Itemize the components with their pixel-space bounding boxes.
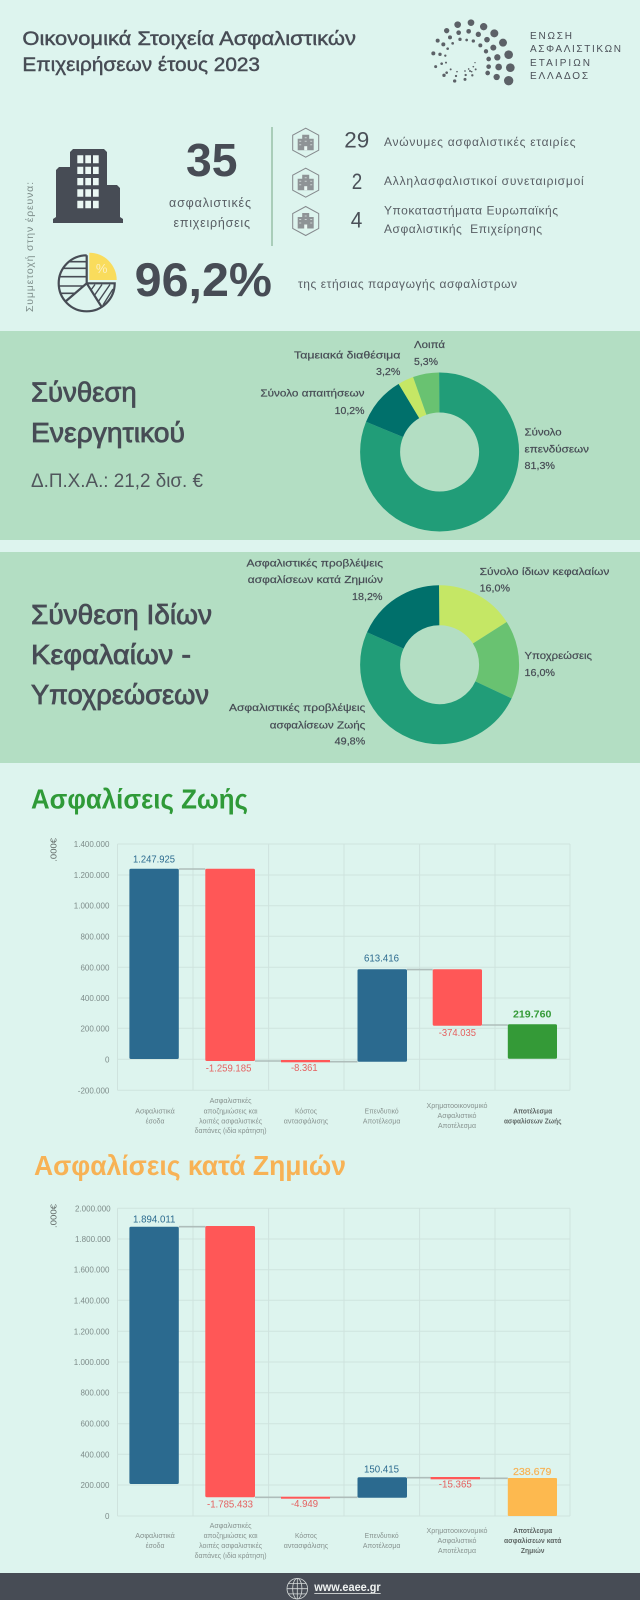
row: mutual cooperatives: 2 — [352, 169, 362, 194]
row: societes anonymes — [293, 128, 576, 157]
donut labels: equity and liabilities: Υποχρεώσεις — [524, 650, 592, 662]
row: societes anonymes: 29 — [344, 128, 369, 152]
heading: assets composition: Ενεργητικού — [31, 417, 185, 448]
donut labels: equity and liabilities: 49,8% — [335, 736, 365, 747]
donut labels: assets: Σύνολο — [524, 427, 562, 439]
y axis labels: 200.000 — [80, 1024, 110, 1033]
donut labels: equity and liabilities: ασφαλίσεων Ζωής — [270, 719, 366, 731]
heading: assets composition — [31, 377, 185, 448]
category labels: Ζημιών — [521, 1546, 545, 1555]
value labels: -1.785.433 — [207, 1499, 253, 1511]
value labels: -4.949 — [291, 1498, 318, 1510]
category labels: δαπάνες (ιδία κράτηση) — [195, 1551, 267, 1560]
logo wordmark: ΕΛΛΑΔΟΣ — [530, 71, 588, 82]
donut labels: equity and liabilities: Ασφαλιστικές προβλέψεις — [229, 702, 366, 714]
icon: logo dot swirl — [431, 19, 515, 85]
stat: 35 insurance companies: επιχειρήσεις — [174, 216, 250, 230]
connectors — [179, 869, 508, 1062]
stat: 35 insurance companies: 35 — [186, 134, 238, 186]
title: Οικονομικά Στοιχεία Ασφαλιστικών — [22, 28, 356, 50]
icon: pie chart — [59, 253, 117, 311]
logo wordmark: ΑΣΦΑΛΙΣΤΙΚΩΝ — [530, 44, 621, 55]
logo — [431, 19, 621, 85]
donut labels: assets — [260, 339, 589, 472]
category labels: λοιπές ασφαλιστικές — [199, 1116, 263, 1126]
category labels: Ασφαλιστικά — [135, 1106, 175, 1116]
category labels: ασφαλίσεων κατά — [504, 1536, 562, 1545]
row: mutual cooperatives: Αλληλασφαλιστικοί συνεταιρισμοί — [384, 174, 584, 188]
y axis labels: 400.000 — [80, 1450, 110, 1459]
category labels: έσοδα — [146, 1541, 165, 1550]
icon: globe — [287, 1578, 308, 1599]
category labels: Επενδυτικό — [365, 1106, 399, 1116]
y axis labels: 1.000.000 — [74, 1358, 110, 1367]
y axis labels: 1.200.000 — [74, 871, 110, 880]
value labels: 613.416 — [364, 952, 399, 964]
heading: non-life insurance: Ασφαλίσεις κατά Ζημιών — [34, 1150, 346, 1181]
category labels: αποζημιώσεις και — [204, 1106, 258, 1116]
footer — [0, 1573, 640, 1600]
y axis labels: 1.400.000 — [74, 1296, 110, 1305]
value labels: 238.679 — [513, 1466, 552, 1478]
y axis labels: 200.000 — [80, 1481, 110, 1490]
y axis labels: 400.000 — [80, 994, 110, 1003]
category labels: έσοδα — [146, 1116, 165, 1126]
category labels: Ασφαλιστικά — [135, 1531, 175, 1540]
category labels: Αποτέλεσμα — [438, 1546, 477, 1555]
category labels: Χρηματοοικονομικό — [426, 1526, 488, 1535]
chart: life insurance waterfall — [48, 838, 570, 1135]
category labels: ασφαλίσεων Ζωής — [504, 1116, 562, 1126]
heading: life insurance: Ασφαλίσεις Ζωής — [31, 783, 248, 814]
stat: 35 insurance companies: ασφαλιστικές — [169, 196, 251, 210]
donut chart: assets — [380, 392, 499, 512]
heading: equity and liabilities composition: Υποχρεώσεων — [31, 679, 209, 710]
category labels: λοιπές ασφαλιστικές — [199, 1541, 263, 1550]
donut labels: assets: 5,3% — [414, 357, 438, 368]
donut labels: equity and liabilities: Σύνολο ίδιων κεφαλαίων — [480, 566, 609, 578]
donut labels: equity and liabilities: 16,0% — [524, 668, 555, 679]
icon: pie chart: % — [96, 261, 108, 276]
icon: hexagon building — [293, 168, 319, 197]
icon: office building — [53, 149, 123, 223]
y axis unit: .000€ — [48, 1204, 58, 1228]
y axis labels: 0 — [105, 1512, 110, 1521]
category labels: Ασφαλιστικό — [438, 1536, 476, 1545]
donut labels: equity and liabilities: ασφαλίσεων κατά Ζημιών — [248, 574, 383, 586]
value labels: 150.415 — [364, 1464, 399, 1476]
row: societes anonymes: Ανώνυμες ασφαλιστικές εταιρίες — [384, 135, 576, 149]
bars — [129, 1226, 557, 1516]
category labels: Αποτέλεσμα — [438, 1121, 477, 1130]
donut labels: equity and liabilities: 16,0% — [480, 584, 510, 595]
value labels: -1.259.185 — [206, 1063, 252, 1075]
category labels: αντασφάλισης — [284, 1116, 329, 1126]
y axis labels: -200.000 — [78, 1086, 110, 1095]
panel: equity and liabilities composition — [0, 552, 640, 763]
value labels — [133, 853, 552, 1075]
row: EU branches: 4 — [351, 207, 362, 232]
donut labels: assets: 3,2% — [376, 367, 401, 378]
category labels: Επενδυτικό — [365, 1531, 399, 1540]
category labels: Ασφαλιστικές — [210, 1521, 252, 1530]
connectors — [179, 1227, 508, 1497]
donut labels: equity and liabilities: Ασφαλιστικές προβλέψεις — [246, 558, 383, 570]
icon: hexagon building — [293, 128, 319, 157]
donut labels: assets: Λοιπά — [414, 339, 445, 351]
chart: non-life insurance waterfall — [48, 1204, 570, 1560]
category labels — [135, 1521, 562, 1560]
donut labels: assets: Σύνολο απαιτήσεων — [260, 388, 364, 400]
row: EU branches: Υποκαταστήματα Ευρωπαϊκής — [384, 204, 558, 218]
y axis labels: 1.600.000 — [74, 1266, 110, 1275]
category labels: Ασφαλιστικές — [210, 1096, 252, 1105]
y axis labels: 600.000 — [80, 1420, 110, 1429]
y axis labels: 2.000.000 — [75, 1204, 111, 1213]
value labels: -15.365 — [439, 1479, 472, 1491]
logo wordmark: ΕΤΑΙΡΙΩΝ — [530, 58, 590, 69]
icon: hexagon building — [293, 206, 319, 236]
row: mutual cooperatives — [293, 168, 584, 197]
y axis labels: 1.000.000 — [74, 902, 110, 911]
value labels: 219.760 — [513, 1008, 552, 1020]
value labels: -8.361 — [291, 1062, 318, 1074]
heading: equity and liabilities composition: Σύνθεση Ιδίων — [31, 599, 212, 630]
y axis labels: 1.800.000 — [75, 1235, 111, 1244]
value labels: -374.035 — [439, 1027, 476, 1039]
title: Επιχειρήσεων έτους 2023 — [22, 54, 260, 76]
y axis labels: 800.000 — [80, 1389, 110, 1398]
stat: 96.2% of annual premiums — [135, 253, 517, 306]
category labels: Ασφαλιστικό — [438, 1111, 476, 1120]
vertical caption: survey participation: Συμμετοχή στην έρευνα: — [24, 182, 36, 312]
logo wordmark — [530, 31, 621, 82]
value labels: 1.894.011 — [133, 1213, 176, 1225]
donut labels: equity and liabilities — [229, 558, 609, 747]
value labels: 1.247.925 — [133, 853, 175, 865]
heading: equity and liabilities composition — [31, 599, 212, 710]
stat: 96.2% of annual premiums: της ετήσιας παραγωγής ασφαλίστρων — [298, 277, 517, 291]
bars — [129, 869, 557, 1062]
y axis labels — [74, 1204, 111, 1521]
title — [22, 28, 356, 76]
donut chart: equity and liabilities — [380, 605, 499, 724]
heading: equity and liabilities composition: Κεφαλαίων - — [31, 639, 191, 670]
y axis unit: .000€ — [48, 838, 58, 862]
row: EU branches: Ασφαλιστικής Επιχείρησης — [384, 222, 542, 236]
row: EU branches — [293, 204, 558, 236]
donut labels: assets: επενδύσεων — [524, 443, 589, 455]
category labels: αποζημιώσεις και — [204, 1531, 258, 1540]
y axis labels — [74, 840, 110, 1095]
panel: assets composition — [0, 331, 640, 540]
category labels: Αποτέλεσμα — [363, 1116, 401, 1126]
donut labels: equity and liabilities: 18,2% — [352, 592, 383, 603]
category labels: Κόστος — [295, 1106, 317, 1116]
category labels: Χρηματοοικονομικό — [426, 1101, 488, 1110]
category labels — [135, 1096, 562, 1135]
category labels: Κόστος — [295, 1531, 317, 1540]
stat: 35 insurance companies — [169, 134, 251, 230]
donut labels: assets: 10,2% — [335, 406, 365, 417]
y axis labels: 600.000 — [80, 963, 110, 972]
y axis labels: 800.000 — [80, 932, 110, 941]
category labels: Αποτέλεσμα — [513, 1526, 553, 1535]
donut labels: assets: 81,3% — [524, 461, 555, 472]
category labels: αντασφάλισης — [284, 1541, 329, 1550]
category labels: Αποτέλεσμα — [363, 1541, 401, 1550]
value labels — [133, 1213, 552, 1511]
logo wordmark: ΕΝΩΣΗ — [530, 31, 572, 42]
y axis labels: 0 — [105, 1055, 110, 1064]
text: total assets value: Δ.Π.Χ.Α.: 21,2 δισ. € — [31, 470, 203, 492]
y axis labels: 1.200.000 — [74, 1327, 110, 1336]
category labels: Αποτέλεσμα — [513, 1106, 553, 1116]
donut labels: assets: Ταμειακά διαθέσιμα — [294, 349, 401, 361]
stat: 96.2% of annual premiums: 96,2% — [135, 253, 272, 306]
y axis labels: 1.400.000 — [74, 840, 110, 849]
heading: assets composition: Σύνθεση — [31, 377, 137, 408]
footer link: www.eaee.gr — [313, 1582, 381, 1594]
category labels: δαπάνες (ιδία κράτηση) — [195, 1126, 267, 1135]
